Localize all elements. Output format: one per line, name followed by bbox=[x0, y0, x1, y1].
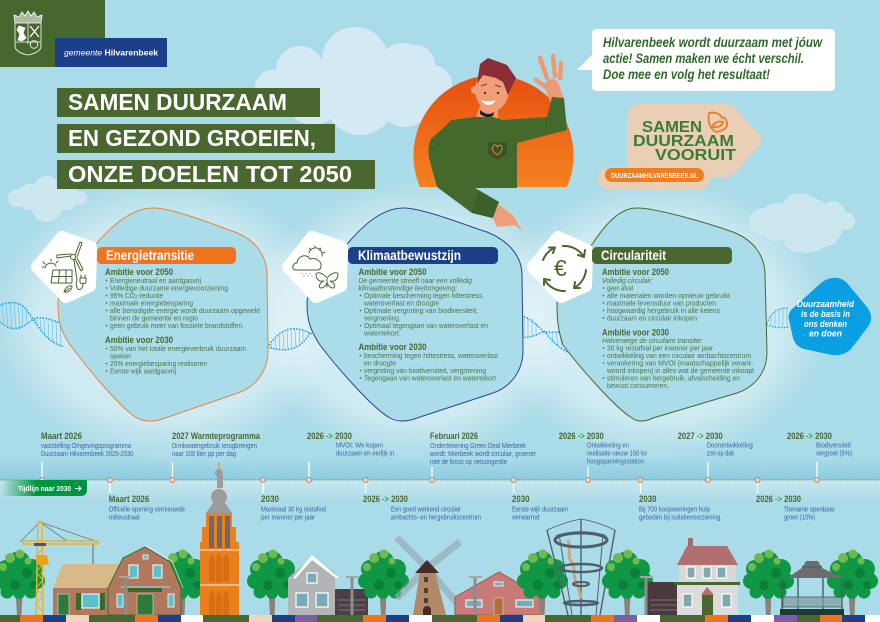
tree: after lookout bbox=[602, 550, 653, 615]
header pill: Circulariteit bbox=[601, 247, 666, 263]
milestone: milieustraat: milieustraat bbox=[109, 512, 140, 522]
text: ambition 2030: 50% van het totale energieverbruik duurzaam bbox=[110, 344, 246, 353]
text: ambition 2050 bbox=[358, 267, 488, 338]
text: ambition 2050: Ambitie voor 2050 bbox=[358, 267, 426, 278]
milestone: zon op dak: zon op dak bbox=[707, 448, 735, 458]
text: ambition 2030: bewust consumeren. bbox=[607, 381, 669, 390]
text: ambition 2050: geen gebruik meer van fossiele brandstoffen. bbox=[110, 321, 244, 330]
sweater bbox=[428, 97, 567, 218]
tree: centre-left bbox=[247, 550, 298, 615]
milestone: Maart 2026 omgevingsprogramma: Duurzaam Hilvarenbeek 2025-2030 bbox=[41, 449, 134, 458]
icon: leaf heart bbox=[709, 112, 727, 132]
milestone: Februari 2026: Februari 2026 bbox=[430, 431, 478, 442]
milestone: hoogspanningsstation: 2026 -> 2030 bbox=[559, 431, 604, 442]
tree: behind tower bbox=[157, 550, 208, 615]
text: ambition 2030: verankering van MVOI (maatschappelijk verant- bbox=[607, 358, 754, 368]
text: ambition 2050 bbox=[105, 267, 260, 330]
panel: Energietransitie bbox=[37, 208, 268, 421]
milestone: ambachtscentrum: Een goed werkend circulair bbox=[391, 504, 461, 514]
title bbox=[57, 88, 375, 189]
character: waving man bbox=[414, 56, 574, 232]
milestone: openbaar groen: Toename openbaar bbox=[784, 504, 835, 514]
milestone: Februari 2026: met de focus op netcongestie bbox=[430, 457, 507, 466]
gazebo bbox=[780, 561, 844, 615]
header: municipality bbox=[0, 0, 167, 67]
milestone: biodiversiteit: 2026 -> 2030 bbox=[787, 431, 832, 442]
ground colour strip bbox=[0, 615, 880, 622]
logo tag: samen duurzaam vooruit: SAMEN bbox=[642, 119, 702, 136]
milestone: milieustraat bbox=[109, 494, 185, 522]
grey house bbox=[288, 555, 368, 615]
header pill: Klimaatbewustzijn bbox=[358, 247, 461, 263]
icon: coat of arms bbox=[14, 11, 42, 55]
tree: before windmill bbox=[358, 550, 409, 615]
text: ambition 2050: geen afval bbox=[607, 284, 633, 292]
panel: Klimaatbewustzijn bbox=[288, 208, 523, 421]
milestone: MVOI: 2026 -> 2030 bbox=[307, 431, 352, 442]
milestone: eerste wijk: Eerste wijk duurzaam bbox=[512, 504, 568, 514]
text: ambition 2030: ontwikkeling van een circulair ambachtscentrum bbox=[607, 351, 751, 360]
neck bbox=[474, 106, 498, 122]
callout: sustainability basis: en doen bbox=[809, 328, 842, 340]
title: ONZE DOELEN TOT 2050 bbox=[68, 161, 352, 187]
tree: far left bbox=[0, 550, 45, 615]
milestone: milieustraat: Officiële opening vernieuwde bbox=[109, 504, 185, 514]
text: ambition 2050: Energieneutraal en aardgasvrij bbox=[110, 276, 201, 285]
timeline tag: Tijdlijn naar 2030 bbox=[18, 484, 71, 493]
milestone: eerste wijk: verwarmd bbox=[512, 512, 540, 522]
text: ambition 2030 bbox=[358, 342, 498, 382]
text: ambition 2030 bbox=[105, 335, 246, 376]
sun disc bbox=[414, 75, 574, 187]
icon tile: circular euro bbox=[533, 237, 587, 297]
milestone: 2027 Warmteprogramma: naar 100 liter pp per dag bbox=[172, 449, 236, 458]
text: ambition 2030: 30 kg restafval per inwoner per jaar bbox=[607, 344, 713, 352]
callout: sustainability basis: is de basis in bbox=[801, 309, 850, 320]
head bbox=[475, 69, 509, 111]
white house bbox=[640, 538, 740, 615]
text: ambition 2050: maximale levensduur van producten bbox=[607, 298, 716, 308]
text: ambition 2050: alle benodigde energie wordt duurzaam opgewekt bbox=[110, 306, 260, 315]
milestone: zon op dak bbox=[678, 431, 753, 458]
text: ambition 2030: stimuleren van hergebruik, afvalscheiding en bbox=[607, 374, 740, 382]
text: ambition 2030: en droogte bbox=[364, 358, 396, 368]
milestone: zon op dak: 2027 -> 2030 bbox=[678, 431, 723, 442]
milestone: eerste wijk bbox=[512, 494, 568, 522]
milestone: Februari 2026: wordt: Mierbeek wordt circulair, groener bbox=[429, 449, 536, 458]
timeline tag bbox=[0, 480, 87, 496]
text: ambition 2050: watertekort bbox=[363, 328, 399, 338]
icon tile: circular euro: € bbox=[554, 255, 567, 281]
panel: Circulariteit bbox=[533, 208, 767, 421]
speech bubble: actie! Samen maken we écht verschil. bbox=[603, 51, 804, 66]
tree: right bbox=[743, 550, 794, 615]
header pill bbox=[592, 247, 732, 264]
text: ambition 2050: De gemeente streeft naar een volledig bbox=[358, 276, 473, 285]
milestone: ambachtscentrum bbox=[363, 494, 481, 522]
milestone: restafval: 2030 bbox=[261, 494, 279, 505]
milestone: openbaar groen bbox=[756, 494, 835, 522]
milestone: biodiversiteit bbox=[787, 431, 852, 458]
cloud: right bbox=[749, 193, 855, 253]
milestone: biodiversiteit: Biodiversiteit bbox=[816, 440, 851, 450]
milestone: koopwoningen: geboden bij isolatievoorziening. bbox=[639, 512, 722, 522]
title: EN GEZOND GROEIEN, bbox=[68, 125, 316, 151]
cloud: top centre bbox=[255, 27, 452, 135]
text: ambition 2050: wateroverlast en droogte bbox=[363, 298, 439, 308]
milestone: Februari 2026 bbox=[429, 431, 536, 466]
timeline axis bbox=[0, 462, 880, 493]
text: ambition 2030 bbox=[602, 328, 754, 390]
farmhouse bbox=[53, 545, 183, 615]
chest badge bbox=[488, 142, 507, 160]
dna helix: towards callout bbox=[767, 308, 790, 328]
dna helix: between climate and circularity bbox=[516, 315, 569, 353]
speech bubble: Doe mee en volg het resultaat! bbox=[603, 67, 770, 82]
milestone: ambachtscentrum: 2026 -> 2030 bbox=[363, 494, 408, 505]
milestone: milieustraat: Maart 2026 bbox=[109, 494, 149, 505]
milestone: hoogspanningsstation bbox=[559, 431, 647, 466]
milestone: ambachtscentrum: ambachts- en hergebruikscentrum bbox=[391, 512, 481, 522]
tree: before lookout bbox=[517, 550, 568, 615]
milestone: MVOI bbox=[307, 431, 394, 458]
milestone: biodiversiteit: vergroot (5%) bbox=[816, 448, 852, 458]
milestone: 2027 Warmteprogramma bbox=[172, 431, 261, 458]
text: ambition 2050: Ambitie voor 2050 bbox=[602, 267, 669, 278]
callout: sustainability basis bbox=[789, 278, 871, 355]
church tower bbox=[200, 462, 239, 615]
header pill: Energietransitie bbox=[106, 247, 194, 263]
dna helix: far left bbox=[0, 303, 64, 347]
speech bubble bbox=[577, 29, 835, 91]
callout: sustainability basis: ons denken bbox=[804, 319, 847, 330]
text: ambition 2050 bbox=[602, 267, 730, 322]
text: ambition 2050: Volledig circulair: bbox=[602, 276, 653, 285]
logo tag: samen duurzaam vooruit bbox=[598, 104, 762, 189]
text: ambition 2030: Ambitie voor 2030 bbox=[602, 328, 669, 338]
milestone: Maart 2026 omgevingsprogramma bbox=[41, 431, 134, 458]
milestone: koopwoningen: 2030 bbox=[639, 494, 656, 505]
dna helix: between energy and climate bbox=[268, 329, 312, 350]
milestone: koopwoningen: Bij 700 koopwoningen hulp bbox=[639, 504, 710, 514]
text: ambition 2050: Volledige duurzame energievoorziening bbox=[110, 284, 228, 292]
icon tile: climate bbox=[288, 237, 342, 297]
pointing hand bbox=[493, 204, 523, 232]
text: ambition 2050: hoogwaardig hergebruik in alle ketens bbox=[607, 306, 720, 315]
windmill bbox=[397, 538, 460, 615]
milestone: hoogspanningsstation: hoogspanningsstation bbox=[587, 456, 644, 466]
text: ambition 2030: Halverwege de circulaire transitie: bbox=[602, 336, 703, 345]
title: SAMEN DUURZAAM bbox=[68, 89, 287, 115]
milestone: Februari 2026: Ondertekening Green Deal Mierbeek bbox=[430, 441, 526, 450]
callout: sustainability basis: Duurzaamheid bbox=[797, 299, 855, 310]
text: ambition 2050: Optimaal tegengaan van wateroverlast en bbox=[364, 321, 488, 330]
text: ambition 2050: klimaatbestendige leefomgeving: bbox=[358, 284, 457, 292]
text: ambition 2030: Tegengaan van wateroverlast en watertekort bbox=[364, 374, 496, 382]
crane bbox=[20, 522, 98, 615]
logo tag: samen duurzaam vooruit: DUURZAAMHILVARENBEEK.NL bbox=[611, 173, 699, 180]
text: ambition 2050: 95% CO₂-reductie bbox=[110, 291, 163, 300]
milestone: koopwoningen bbox=[639, 494, 722, 522]
logo tag: samen duurzaam vooruit: DUURZAAM bbox=[633, 133, 734, 150]
milestone: zon op dak: Doorontwikkeling bbox=[707, 440, 753, 450]
logo text: gemeente Hilvarenbeek bbox=[64, 48, 158, 58]
milestone: Maart 2026 omgevingsprogramma: Maart 2026 bbox=[41, 431, 82, 442]
text: ambition 2030: woord inkopen) in alles wat de gemeente inkoopt bbox=[606, 366, 754, 375]
text: ambition 2030: opwekken bbox=[110, 352, 131, 360]
milestone: eerste wijk: 2030 bbox=[512, 494, 530, 505]
milestone: Maart 2026 omgevingsprogramma: vaststelling Omgevingsprogramma bbox=[41, 441, 131, 450]
milestone: hoogspanningsstation: Ontwikkeling en bbox=[587, 440, 629, 450]
text: ambition 2050: binnen de gemeente en regio bbox=[110, 314, 198, 322]
text: ambition 2050: Ambitie voor 2050 bbox=[105, 267, 173, 278]
text: ambition 2050: maximale energiebesparing bbox=[110, 298, 193, 308]
text: ambition 2030: Ambitie voor 2030 bbox=[358, 342, 426, 353]
speech bubble: Hilvarenbeek wordt duurzaam met jóuw bbox=[603, 35, 823, 50]
lookout tower bbox=[547, 519, 615, 615]
cloud: left small bbox=[8, 176, 87, 222]
raised hand bbox=[536, 56, 561, 100]
milestone: openbaar groen: 2026 -> 2030 bbox=[756, 494, 801, 505]
text: ambition 2030: bescherming tegen hittestress, wateroverlast bbox=[364, 351, 498, 360]
tree: far right bbox=[827, 550, 878, 615]
text: ambition 2050: Optimale vergroting van biodiversiteit, bbox=[364, 306, 478, 315]
logo tag: samen duurzaam vooruit: VOORUIT bbox=[655, 147, 736, 164]
text: ambition 2050: alle materialen worden opnieuw gebruikt bbox=[607, 291, 730, 300]
text: ambition 2030: Ambitie voor 2030 bbox=[105, 335, 173, 346]
milestone: restafval: Maximaal 30 kg restafval bbox=[261, 504, 326, 514]
milestone: hoogspanningsstation: realisatie nieuw 150 kv bbox=[587, 448, 647, 458]
text: ambition 2030: 20% energiebesparing realiseren bbox=[110, 359, 207, 368]
text: ambition 2030: vergroting van biodiversiteit, vergroening bbox=[364, 366, 486, 375]
milestone: MVOI: MVOI: We kopen bbox=[336, 440, 383, 450]
milestone: 2027 Warmteprogramma: 2027 Warmteprogramma bbox=[172, 431, 261, 442]
text: ambition 2030: Eerste wijk aardgasvrij bbox=[110, 366, 176, 376]
text: ambition 2050: Optimale bescherming tegen hittestress, bbox=[364, 291, 484, 300]
text: ambition 2050: duurzaam en circulair inkopen bbox=[607, 314, 697, 322]
milestone: restafval: per inwoner per jaar bbox=[261, 512, 315, 522]
milestone: MVOI: duurzaam en eerlijk in bbox=[336, 448, 394, 458]
milestone: 2027 Warmteprogramma: Drinkwatergebruik terugbrengen bbox=[172, 441, 257, 450]
milestone: restafval bbox=[261, 494, 326, 522]
milestone: openbaar groen: groen (10%) bbox=[784, 512, 815, 522]
text: ambition 2050: vergroening bbox=[364, 314, 399, 322]
pink house bbox=[455, 572, 542, 615]
icon tile: energy bbox=[37, 237, 91, 297]
